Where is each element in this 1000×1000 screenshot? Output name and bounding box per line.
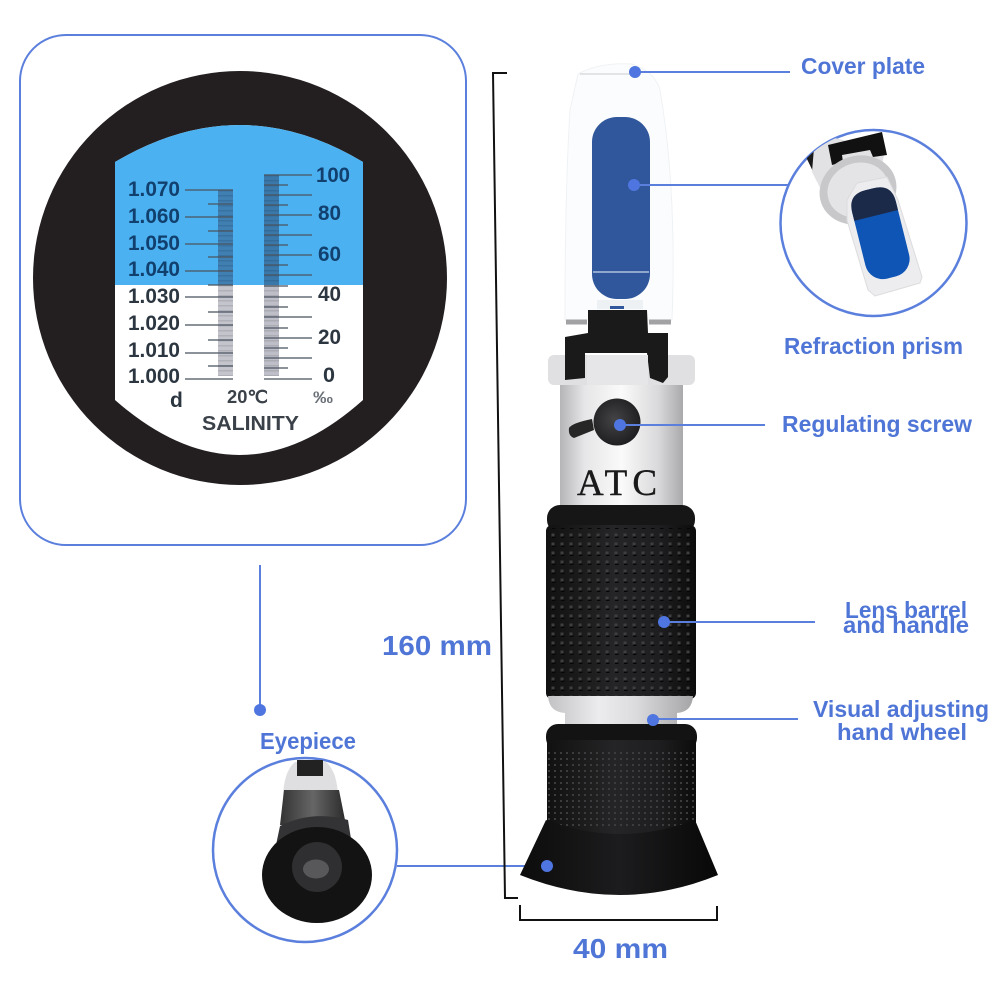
eyepiece black field — [33, 71, 447, 485]
scale units: SALINITY — [202, 413, 300, 435]
callout: visual adjusting hand wheel: Visual adjusting — [813, 696, 989, 722]
left scale numbers: 1.000 — [128, 365, 180, 388]
callout: cover plate — [629, 53, 925, 79]
connector: eyepiece to cup — [397, 865, 545, 867]
prism — [592, 117, 650, 299]
callout: refraction prism — [628, 179, 963, 359]
right scale numbers: 100 — [316, 164, 350, 187]
scale units: 20℃ — [227, 387, 268, 407]
callout dot: eye cup — [541, 860, 553, 872]
right scale numbers: 40 — [318, 283, 341, 306]
hinge block — [565, 310, 668, 383]
right scale numbers: 80 — [318, 202, 341, 225]
right scale numbers: 60 — [318, 243, 341, 266]
left scale numbers: 1.070 — [128, 178, 180, 201]
eye cup — [520, 820, 718, 895]
callout: lens barrel and handle: Lens barrel — [845, 597, 967, 623]
label: 40 mm: 40 mm — [573, 933, 668, 964]
hinge pins — [566, 320, 671, 324]
panel: scale view — [20, 35, 466, 545]
callout: lens barrel and handle: and handle — [843, 612, 969, 638]
left scale numbers: 1.020 — [128, 312, 180, 335]
collar — [548, 355, 695, 385]
silver ring — [548, 696, 693, 737]
handle — [546, 505, 696, 699]
regulating screw — [569, 398, 640, 446]
dimension: height — [493, 73, 518, 898]
dimension: width — [520, 905, 717, 920]
scale units: ‰ — [313, 388, 333, 407]
callout: visual adjusting hand wheel — [647, 696, 989, 745]
barrel — [560, 385, 683, 510]
label: Eyepiece: Eyepiece — [260, 728, 356, 754]
callout: lens barrel and handle — [658, 597, 969, 638]
right scale numbers: 0 — [323, 364, 335, 387]
callout: regulating screw: Regulating screw — [782, 411, 972, 437]
adjusting wheel — [546, 724, 697, 836]
cover plate — [565, 64, 673, 320]
left scale numbers: 1.050 — [128, 232, 180, 255]
label: 160 mm: 160 mm — [382, 630, 492, 661]
callout: visual adjusting hand wheel: hand wheel — [837, 719, 967, 745]
callout: cover plate: Cover plate — [801, 53, 925, 79]
left scale numbers: 1.040 — [128, 258, 180, 281]
left scale numbers: 1.030 — [128, 285, 180, 308]
inset: eyepiece — [213, 758, 397, 942]
inset: refraction prism — [780, 130, 966, 316]
reticle — [110, 120, 370, 460]
refractometer — [520, 64, 718, 895]
connector: scale view to eyepiece — [254, 565, 266, 716]
left scale numbers: 1.060 — [128, 205, 180, 228]
left scale numbers: 1.010 — [128, 339, 180, 362]
scale units: d — [170, 389, 183, 412]
right scale numbers: 20 — [318, 326, 341, 349]
scale units — [170, 387, 333, 435]
left scale numbers — [128, 178, 180, 388]
callout: refraction prism: Refraction prism — [784, 333, 963, 359]
right scale numbers — [316, 164, 350, 387]
callout: regulating screw — [614, 411, 972, 437]
ATC: ATC — [577, 463, 657, 504]
